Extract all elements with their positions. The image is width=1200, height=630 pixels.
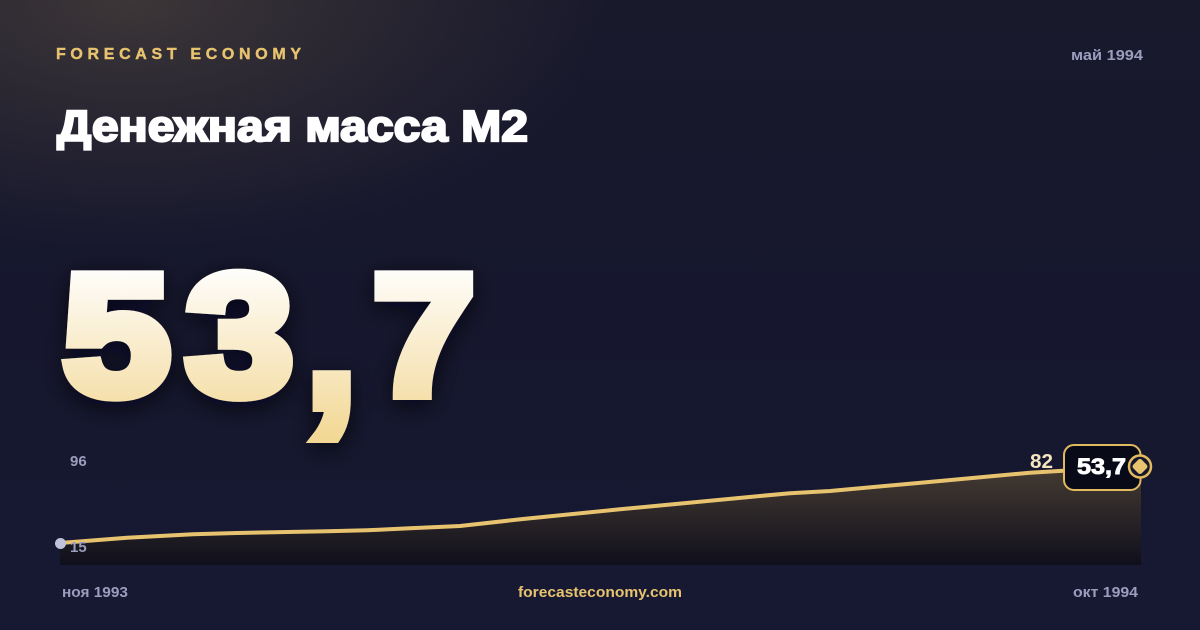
- chart area fill: [60, 470, 1141, 565]
- big value: 7: [373, 239, 475, 431]
- start point marker: [55, 538, 66, 549]
- brand label: FORECAST ECONOMY: [56, 46, 301, 63]
- current value badge: 53,7: [1077, 454, 1126, 479]
- big value: ,: [305, 226, 358, 449]
- current point marker: [1129, 456, 1151, 478]
- current value badge: [1064, 445, 1140, 490]
- axis min label: 15: [70, 539, 87, 556]
- chart: [55, 445, 1151, 565]
- end date label: окт 1994: [1073, 584, 1139, 601]
- axis max label: 96: [70, 453, 87, 470]
- start date label: ноя 1993: [62, 584, 128, 601]
- big value: 3: [186, 239, 293, 431]
- big value: [63, 226, 475, 449]
- title: Денежная масса М2: [57, 102, 528, 151]
- big value: 5: [63, 239, 170, 431]
- peak value label: 82: [1030, 451, 1053, 473]
- chart line: [60, 470, 1141, 543]
- website: forecasteconomy.com: [518, 584, 682, 601]
- date label: май 1994: [1071, 47, 1144, 64]
